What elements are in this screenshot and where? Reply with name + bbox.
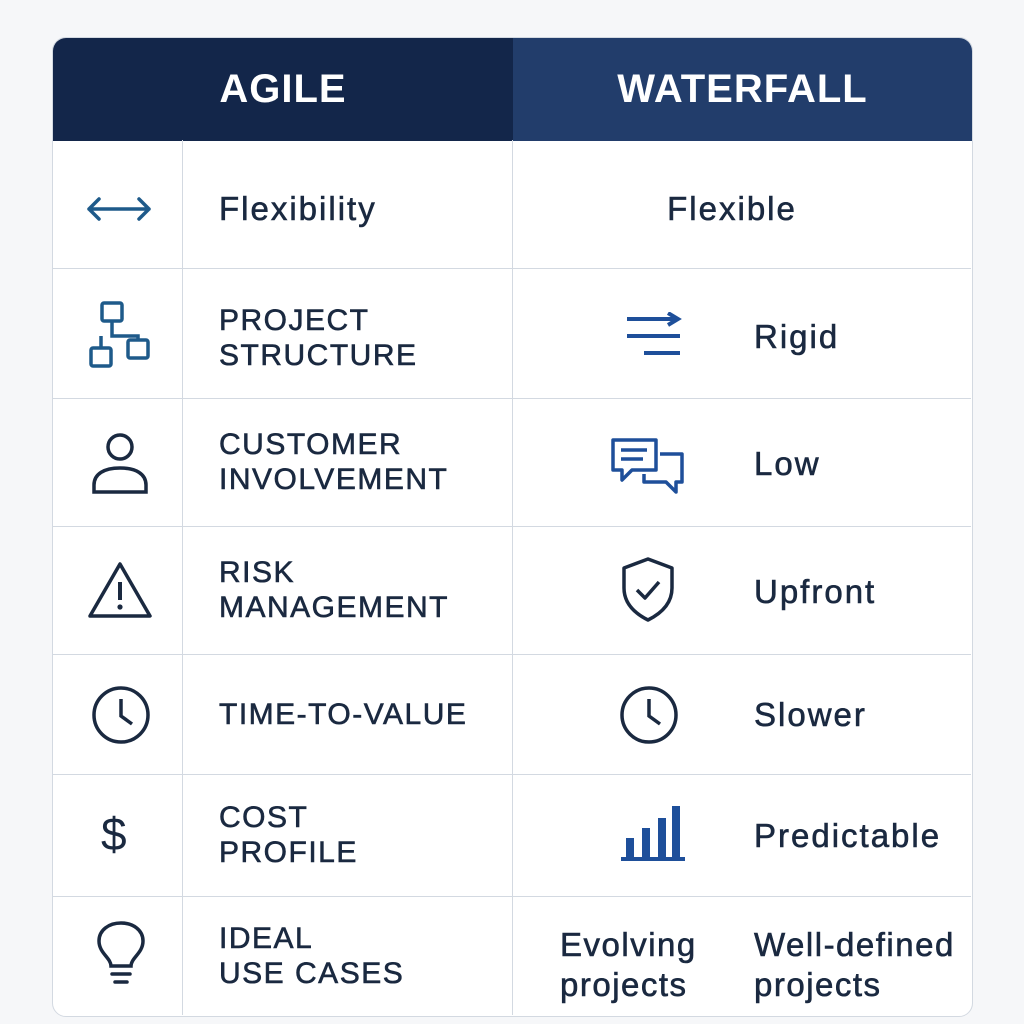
text: ideal use cases: USE CASES — [219, 957, 404, 990]
text: upfront: Upfront — [754, 573, 876, 610]
icon: shield — [622, 557, 674, 622]
icon: clock waterfall — [620, 686, 678, 744]
header: agile: AGILE — [219, 67, 347, 111]
text: evolving projects: projects — [560, 966, 688, 1003]
text: ideal use cases: IDEAL — [219, 922, 313, 955]
text: flexibility: Flexibility — [219, 190, 377, 227]
text: low: Low — [754, 445, 821, 482]
icon: structure — [89, 301, 150, 368]
text: customer involvement: INVOLVEMENT — [219, 463, 448, 496]
text: cost profile: PROFILE — [219, 836, 358, 869]
text: ideal use cases — [219, 922, 404, 990]
text: project structure — [219, 304, 418, 372]
icon: warning — [88, 562, 152, 618]
header: waterfall — [513, 38, 972, 141]
text: project structure: STRUCTURE — [219, 339, 418, 372]
icon: person — [92, 433, 148, 494]
text: customer involvement: CUSTOMER — [219, 428, 402, 461]
text: risk management: RISK — [219, 556, 295, 589]
header: waterfall: WATERFALL — [617, 67, 868, 111]
text: cost profile: COST — [219, 801, 308, 834]
text: well-defined projects: projects — [754, 966, 882, 1003]
text: flexible: Flexible — [667, 190, 797, 227]
text: well-defined projects — [754, 926, 955, 1004]
text: risk management: MANAGEMENT — [219, 591, 449, 624]
text: well-defined projects: Well-defined — [754, 926, 955, 963]
text: evolving projects — [560, 926, 697, 1004]
text: project structure: PROJECT — [219, 304, 370, 337]
icon: clock agile — [92, 686, 150, 744]
text: predictable: Predictable — [754, 817, 941, 854]
text: time-to-value: TIME-TO-VALUE — [219, 698, 467, 731]
text: risk management — [219, 556, 449, 624]
icon: lightbulb — [97, 921, 145, 984]
text: slower: Slower — [754, 696, 867, 733]
text: evolving projects: Evolving — [560, 926, 697, 963]
icon: double arrow — [87, 197, 151, 221]
icon: bar chart — [621, 806, 685, 861]
icon: lines — [627, 312, 682, 355]
icon: dollar: $ — [101, 808, 129, 860]
text: cost profile — [219, 801, 358, 869]
text: rigid: Rigid — [754, 318, 839, 355]
icon: chat — [611, 438, 684, 494]
text: customer involvement — [219, 428, 448, 496]
header: agile — [53, 38, 513, 141]
